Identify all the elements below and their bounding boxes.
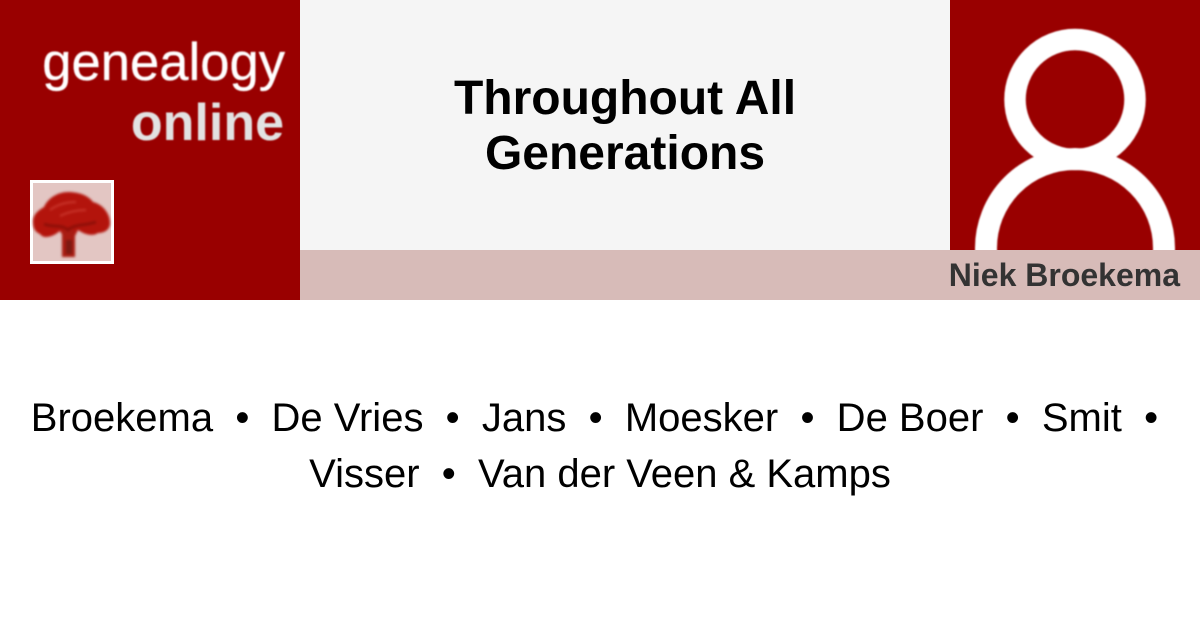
title: Generations [485,127,765,180]
icon: tree [30,180,114,264]
surname list: Broekema • De Vries • Jans • Moesker • De Boer • Smit • [31,396,1158,440]
logo text: genealogy: genealogy [42,33,285,92]
title: Throughout All [454,72,796,125]
logo text: online: online [131,94,284,152]
title [454,72,796,180]
author bar [300,250,1200,300]
header banner [0,0,1200,300]
panel: logo [0,0,300,300]
author name: Niek Broekema [949,257,1180,293]
panel: title background [300,0,950,250]
icon: person avatar [950,0,1200,250]
surname list: Visser • Van der Veen & Kamps [309,452,891,496]
surname list [31,396,1158,496]
